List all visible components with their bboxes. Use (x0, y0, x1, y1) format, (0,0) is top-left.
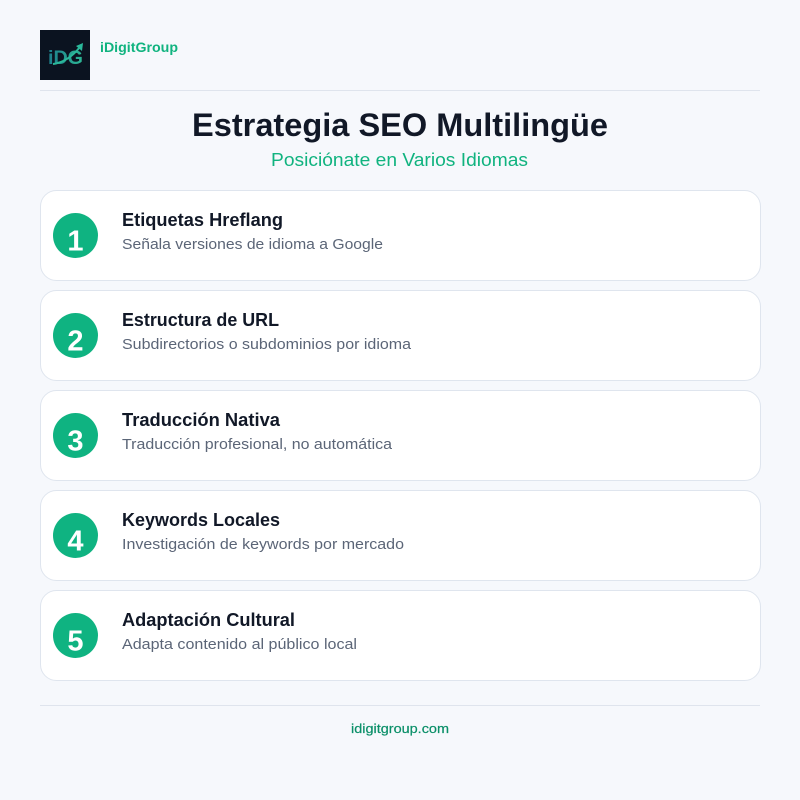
step 2 heading: Estructura de URL (122, 310, 279, 330)
step 4 number badge (53, 513, 98, 558)
step 1 heading: Etiquetas Hreflang (122, 210, 283, 230)
panel: step 1 (40, 190, 760, 280)
step 5 number badge (53, 613, 98, 658)
step 2 description: Subdirectorios o subdominios por idioma (122, 336, 412, 353)
step 1 description: Señala versiones de idioma a Google (122, 236, 383, 253)
step 3 description: Traducción profesional, no automática (122, 436, 393, 453)
panel: step 2 (40, 290, 760, 380)
step 4 description: Investigación de keywords por mercado (122, 536, 404, 553)
step 5 description: Adapta contenido al público local (122, 636, 357, 653)
step 3 number badge: 3 (67, 426, 84, 458)
step 5 heading: Adaptación Cultural (122, 610, 295, 630)
step 4 number badge: 4 (67, 526, 84, 558)
panel: step 4 (40, 490, 760, 580)
step 3 heading: Traducción Nativa (122, 410, 281, 430)
title: Estrategia SEO Multilingüe (192, 107, 608, 143)
step 2 number badge: 2 (67, 326, 84, 358)
step 3 number badge (53, 413, 98, 458)
subtitle: Posiciónate en Varios Idiomas (271, 150, 528, 170)
panel: step 3 (40, 390, 760, 480)
step 4 heading: Keywords Locales (122, 510, 280, 530)
panel: step 5 (40, 590, 760, 680)
step 2 number badge (53, 313, 98, 358)
icon: iDigitGroup logo: iDG (48, 48, 83, 69)
footer link: idigitgroup.com (351, 721, 449, 736)
step 1 number badge: 1 (67, 226, 84, 258)
icon: iDigitGroup logo (40, 30, 90, 80)
brand name: iDigitGroup (100, 39, 178, 55)
step 1 number badge (53, 213, 98, 258)
step 5 number badge: 5 (67, 626, 84, 658)
